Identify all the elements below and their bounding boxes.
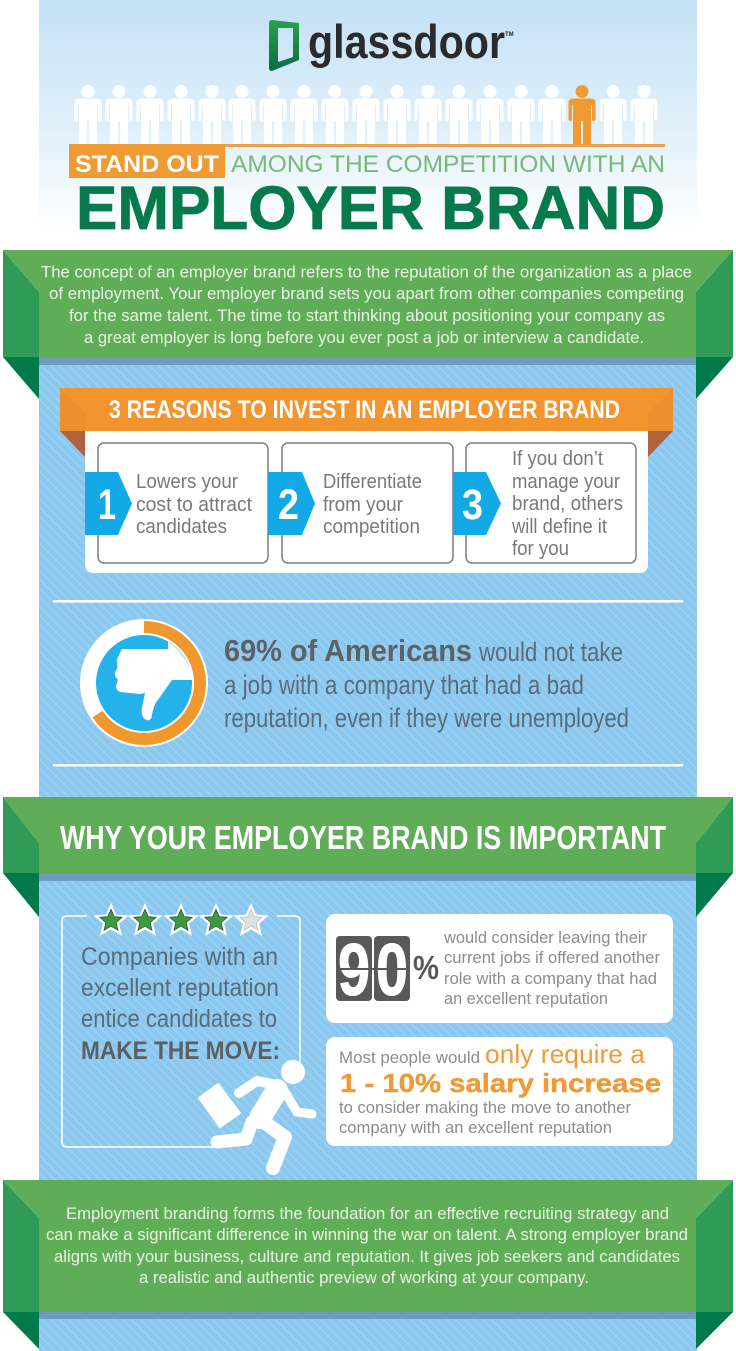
intro text	[41, 262, 692, 347]
panel: salary increase: 1 - 10% salary increase	[340, 1068, 661, 1098]
header sky background	[39, 0, 697, 250]
flip counter 90: 0	[376, 930, 408, 1011]
reason 2: 2	[278, 481, 299, 529]
logo wordmark: glassdoor	[308, 15, 505, 68]
title	[69, 144, 665, 242]
trademark: TM	[505, 32, 514, 38]
frame text: Companies with an	[81, 943, 278, 971]
flip counter 90: 9	[338, 930, 370, 1011]
star rating	[93, 903, 269, 936]
reason 3	[453, 443, 636, 563]
intro text: a great employer is long before you ever post a job or interview a candidate.	[84, 328, 644, 347]
stat text: current jobs if offered another	[444, 949, 660, 967]
intro text: for the same talent. The time to start thinking about positioning your company as	[69, 306, 665, 325]
frame text: entice candidates to	[81, 1005, 277, 1033]
intro text: of employment. Your employer brand sets you apart from other companies competing	[49, 284, 684, 303]
callout: 69% of Americans: a job with a company that had a bad	[224, 670, 584, 700]
orange ribbon	[60, 388, 673, 457]
orange ribbon: 3 REASONS TO INVEST IN AN EMPLOYER BRAND	[109, 396, 620, 424]
stand out text: STAND OUT	[75, 151, 219, 178]
frame text	[81, 943, 280, 1065]
panel: salary increase: only require a	[485, 1039, 646, 1069]
icon: thumbs down donut 69%	[80, 619, 208, 747]
callout: 69% of Americans: 69% of Americans	[224, 633, 472, 668]
panel: salary increase: to consider making the move to another	[339, 1099, 631, 1117]
white card	[85, 431, 648, 573]
reason 2	[268, 443, 453, 563]
reason 3: If you don’t	[512, 448, 603, 470]
intro text: The concept of an employer brand refers to the reputation of the organization as a place	[41, 262, 692, 282]
panel: intro ribbon	[3, 250, 733, 399]
employer brand headline: EMPLOYER BRAND	[76, 174, 665, 242]
frame text: excellent reputation	[81, 974, 279, 1002]
reason 1: candidates	[136, 516, 227, 538]
callout: 69% of Americans	[224, 633, 629, 733]
closing text: a realistic and authentic preview of working at your company.	[139, 1268, 589, 1287]
reason 3: will define it	[511, 516, 607, 538]
reason 1: Lowers your	[136, 471, 238, 493]
orange rule	[69, 144, 665, 147]
reason 3: brand, others	[512, 493, 623, 515]
reason 2: from your	[323, 494, 403, 516]
callout: 69% of Americans: reputation, even if they were unemployed	[224, 703, 629, 733]
closing text	[46, 1204, 688, 1287]
icon: running person with briefcase	[199, 1060, 312, 1168]
reason 3: manage your	[512, 471, 620, 493]
reason 2: competition	[323, 516, 420, 538]
stat text: role with a company that had	[444, 970, 657, 988]
panel: salary increase: Most people would	[339, 1048, 480, 1067]
orange highlight box	[69, 144, 225, 178]
panel: salary increase	[326, 1037, 673, 1146]
closing text: can make a significant difference in winning the war on talent. A strong employer brand	[46, 1225, 688, 1244]
panel: 90% stat	[326, 914, 673, 1023]
panel: why ribbon	[3, 797, 733, 917]
stat text: would consider leaving their	[443, 929, 647, 947]
flip counter 90: %	[413, 949, 439, 986]
reason 1	[85, 443, 268, 563]
flip counter 90	[336, 930, 439, 1011]
frame text: MAKE THE MOVE:	[81, 1037, 280, 1065]
reason 2: Differentiate	[323, 471, 422, 493]
panel: salary increase: company with an excellent reputation	[339, 1119, 612, 1137]
reason 3: 3	[462, 481, 483, 529]
closing text: Employment branding forms the foundation for an effective recruiting strategy and	[66, 1204, 669, 1223]
callout: 69% of Americans: would not take	[478, 637, 623, 667]
stat text: an excellent reputation	[444, 990, 608, 1008]
row of people figures	[74, 85, 658, 144]
icon: glassdoor door	[269, 20, 299, 71]
panel: make the move	[62, 903, 312, 1168]
panel: closing ribbon	[3, 1180, 733, 1349]
subtitle text: AMONG THE COMPETITION WITH AN	[231, 151, 665, 178]
frame	[62, 916, 300, 1147]
panel: 3 reasons	[60, 388, 673, 573]
thumb shape	[115, 642, 193, 720]
reason 3: for you	[512, 538, 569, 560]
logo: glassdoor	[269, 15, 514, 71]
blue striped main panel	[39, 357, 697, 1351]
reason 1: cost to attract	[136, 494, 252, 516]
stat text	[443, 929, 660, 1008]
closing text: aligns with your business, culture and reputation. It gives job seekers and candidates	[54, 1247, 680, 1266]
reason 1: 1	[98, 481, 116, 529]
